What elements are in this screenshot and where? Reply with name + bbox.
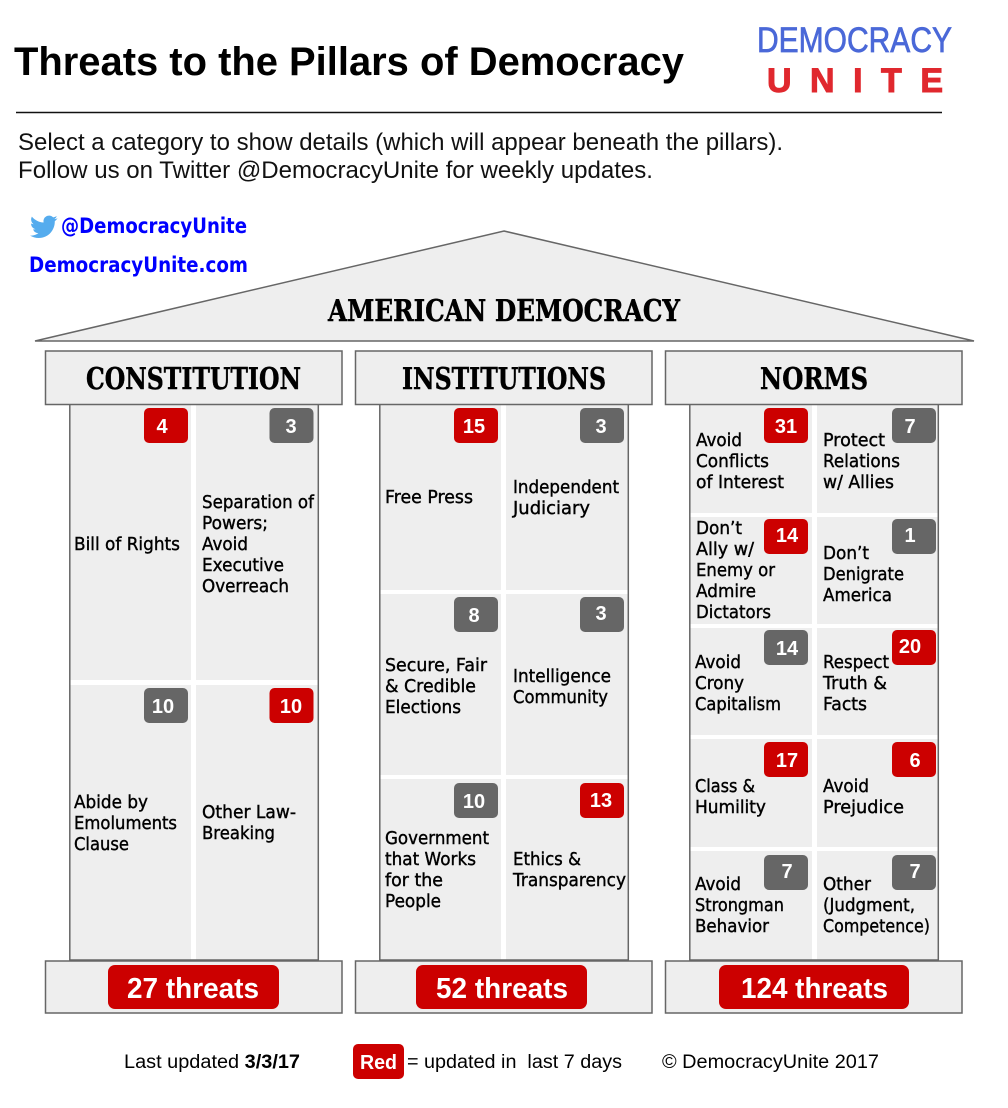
logo: Democracy Unite: UNITE: [767, 62, 943, 100]
cell: Class and Humility: [695, 742, 808, 818]
cell: Avoid Crony Capitalism: Avoid: [695, 653, 741, 673]
website link: DemocracyUnite.com: [29, 253, 248, 277]
cell: Bill of Rights: 4: [156, 416, 168, 438]
cell: Other (Judgment, Competence): Competence): [823, 917, 930, 937]
cell: Free Press: Free Press: [385, 488, 473, 508]
cell: Bill of Rights: Bill of Rights: [74, 535, 180, 555]
cell: Don't Denigrate America: 1: [904, 525, 916, 547]
base: 124 threats: [666, 961, 962, 1013]
cell: Government that Works for the People: [385, 783, 498, 912]
cell: Government that Works for the People: for the: [385, 871, 443, 891]
cell: Ethics and Transparency: [512, 783, 626, 891]
cell: Bill of Rights: [74, 408, 188, 555]
cell: Government that Works for the People: that Works: [385, 850, 476, 870]
cell: Respect Truth and Facts: Respect: [823, 653, 889, 673]
cell: Other Law-Breaking: [202, 688, 314, 844]
cell: Independent Judiciary: Judiciary: [512, 499, 590, 519]
cell: Don't Denigrate America: Denigrate: [823, 565, 904, 585]
cell: Secure, Fair and Credible Elections: 8: [468, 605, 480, 627]
legend: red means updated in last 7 days: = updated in last 7 days: [407, 1052, 622, 1073]
cell: Don't Ally with Enemy or Admire Dictators: [696, 519, 808, 623]
capital heading: NORMS: [760, 362, 868, 397]
cell: Secure, Fair and Credible Elections: [385, 597, 498, 718]
cell: Abide by Emoluments Clause: 10: [152, 696, 174, 718]
intro text: [18, 129, 783, 184]
cell: Other (Judgment, Competence): [823, 855, 936, 937]
cell: Don't Denigrate America: [823, 519, 936, 606]
cell: Ethics and Transparency: Ethics &: [513, 850, 581, 870]
cell: Other Law-Breaking: 10: [280, 696, 302, 718]
cell: Avoid Conflicts of Interest: 31: [775, 416, 797, 438]
cell: Avoid Prejudice: Prejudice: [823, 798, 904, 818]
cell: Abide by Emoluments Clause: Emoluments: [74, 814, 177, 834]
cell: Don't Ally with Enemy or Admire Dictators: 14: [776, 525, 799, 547]
cell: Don't Ally with Enemy or Admire Dictators: Admire: [696, 582, 756, 602]
cell: Avoid Conflicts of Interest: [696, 408, 808, 493]
base: 52 threats: [356, 961, 652, 1013]
cell: Don't Ally with Enemy or Admire Dictators: Ally w/: [696, 540, 754, 560]
cell: Avoid Strongman Behavior: [695, 855, 808, 937]
roof: American Democracy: AMERICAN DEMOCRACY: [327, 294, 680, 329]
icon: twitter bird: [30, 216, 58, 238]
cell: Avoid Prejudice: [823, 742, 936, 818]
base: 27 threats: 27 threats: [127, 973, 259, 1005]
pillar: institutions: [356, 351, 652, 1013]
cell: Government that Works for the People: Government: [385, 829, 489, 849]
cell: Respect Truth and Facts: Truth &: [822, 674, 887, 694]
cell: Class and Humility: Humility: [695, 798, 766, 818]
cell: Independent Judiciary: 3: [595, 416, 607, 438]
capital heading: [666, 351, 962, 404]
cell: Respect Truth and Facts: [822, 630, 936, 715]
cell: Avoid Strongman Behavior: Behavior: [695, 917, 770, 937]
logo: Democracy Unite: [757, 21, 952, 100]
cell: Independent Judiciary: Independent: [513, 478, 619, 498]
cell: Other Law-Breaking: Breaking: [202, 824, 275, 844]
roof: American Democracy: [35, 231, 974, 341]
cell: Avoid Conflicts of Interest: Avoid: [696, 431, 742, 451]
twitter handle link: @DemocracyUnite: [61, 214, 247, 238]
legend: red means updated in last 7 days: [353, 1044, 622, 1079]
cell: Independent Judiciary: [512, 408, 624, 519]
cell: Avoid Strongman Behavior: 7: [781, 861, 793, 883]
cell: Respect Truth and Facts: Facts: [823, 695, 867, 715]
cell: Other (Judgment, Competence): (Judgment,: [823, 896, 915, 916]
cell: Class and Humility: Class &: [695, 777, 755, 797]
cell: Avoid Crony Capitalism: Crony: [695, 674, 744, 694]
cell: Secure, Fair and Credible Elections: & Credible: [385, 677, 476, 697]
cell: Don't Ally with Enemy or Admire Dictators: Dictators: [696, 603, 771, 623]
cell: Intelligence Community: Community: [513, 688, 608, 708]
pillar: constitution: [46, 351, 342, 1013]
cell: Secure, Fair and Credible Elections: Secure, Fair: [385, 656, 488, 676]
cell: Avoid Prejudice: 6: [909, 750, 921, 772]
cell: Intelligence Community: [513, 597, 624, 708]
cell: Avoid Crony Capitalism: Capitalism: [695, 695, 781, 715]
cell: Separation of Powers: Separation of: [202, 493, 315, 513]
cell: Respect Truth and Facts: 20: [899, 636, 921, 658]
cell: Don't Ally with Enemy or Admire Dictators: Don’t: [696, 519, 742, 539]
cell: Abide by Emoluments Clause: Clause: [74, 835, 129, 855]
cell: Avoid Crony Capitalism: 14: [776, 638, 799, 660]
cell: Intelligence Community: 3: [595, 603, 607, 625]
cell: Separation of Powers: Overreach: [202, 577, 289, 597]
cell: Avoid Prejudice: Avoid: [823, 777, 869, 797]
cell: Ethics and Transparency: 13: [590, 790, 612, 812]
cell: Separation of Powers: Powers;: [202, 514, 268, 534]
cell: Abide by Emoluments Clause: Abide by: [74, 793, 148, 813]
cell: Free Press: 15: [463, 416, 485, 438]
footer: last updated: Last updated 3/3/17: [124, 1052, 300, 1073]
cell: Protect Relations with Allies: w/ Allies: [823, 473, 894, 493]
cell: Avoid Conflicts of Interest: of Interest: [696, 473, 784, 493]
cell: Protect Relations with Allies: Relations: [823, 452, 900, 472]
intro text: Follow us on Twitter @DemocracyUnite for weekly updates.: [18, 157, 653, 184]
capital heading: CONSTITUTION: [86, 362, 301, 397]
cell: Separation of Powers: Executive: [202, 556, 284, 576]
cell: Avoid Strongman Behavior: Strongman: [695, 896, 784, 916]
cell: Ethics and Transparency: Transparency: [512, 871, 626, 891]
cell: Secure, Fair and Credible Elections: Elections: [385, 698, 461, 718]
cell: Free Press: [385, 408, 498, 508]
cell: Other (Judgment, Competence): Other: [823, 875, 872, 895]
cell: Class and Humility: 17: [776, 750, 798, 772]
cell: Separation of Powers: Avoid: [202, 535, 248, 555]
shaft: [70, 404, 318, 960]
cell: Avoid Crony Capitalism: [695, 630, 808, 715]
base: 27 threats: [46, 961, 342, 1013]
capital heading: INSTITUTIONS: [402, 362, 606, 397]
cell: Government that Works for the People: People: [385, 892, 441, 912]
cell: Protect Relations with Allies: [823, 408, 936, 493]
cell: Don't Denigrate America: America: [823, 586, 892, 606]
cell: Abide by Emoluments Clause: [74, 688, 188, 855]
cell: Avoid Conflicts of Interest: Conflicts: [696, 452, 769, 472]
intro text: Select a category to show details (which will appear beneath the pillars).: [18, 129, 783, 156]
cell: Don't Denigrate America: Don’t: [823, 544, 869, 564]
legend: red means updated in last 7 days: Red: [360, 1052, 397, 1074]
cell: Other Law-Breaking: Other Law-: [202, 803, 296, 823]
cell: Protect Relations with Allies: 7: [904, 416, 916, 438]
base: 52 threats: 52 threats: [436, 973, 568, 1005]
cell: Government that Works for the People: 10: [463, 791, 485, 813]
capital heading: [356, 351, 652, 404]
cell: Protect Relations with Allies: Protect: [823, 431, 885, 451]
pillar: norms: [666, 351, 962, 1013]
base: 124 threats: 124 threats: [741, 973, 888, 1005]
cell: Other (Judgment, Competence): 7: [909, 861, 921, 883]
cell: Avoid Strongman Behavior: Avoid: [695, 875, 741, 895]
shaft: [690, 404, 938, 960]
cell: Separation of Powers: [202, 408, 315, 597]
cell: Don't Ally with Enemy or Admire Dictators: Enemy or: [696, 561, 776, 581]
cell: Separation of Powers: 3: [285, 416, 297, 438]
title: Threats to the Pillars of Democracy: [14, 40, 685, 84]
cell: Intelligence Community: Intelligence: [513, 667, 611, 687]
footer: copyright: © DemocracyUnite 2017: [662, 1052, 879, 1073]
capital heading: [46, 351, 342, 404]
logo: Democracy Unite: DEMOCRACY: [757, 21, 952, 60]
shaft: [380, 404, 628, 960]
